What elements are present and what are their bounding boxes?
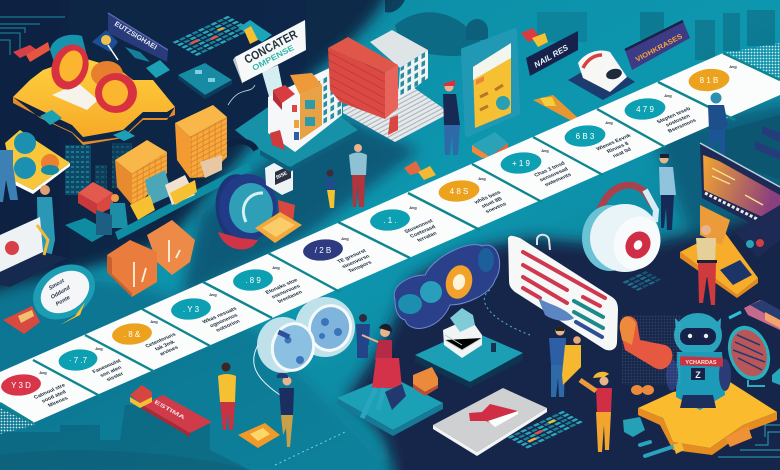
teal road band to buildings bbox=[65, 163, 252, 242]
step 2: Avg bbox=[95, 346, 103, 351]
step 9 bbox=[500, 148, 575, 189]
speech bubble with text bbox=[23, 253, 105, 331]
red building and grey base bbox=[328, 30, 450, 142]
twin discs bbox=[254, 297, 357, 395]
teal platform with paper stack bbox=[415, 308, 523, 388]
orange buildings bbox=[115, 105, 227, 220]
person: navy figure behind centre bbox=[356, 314, 370, 358]
phone with yellow screen bbox=[463, 30, 518, 135]
step 10: neat 0d bbox=[612, 147, 633, 159]
step 3: . 8 & bbox=[124, 330, 141, 339]
teal platform below white building bbox=[228, 85, 358, 172]
oval data badge bbox=[721, 320, 777, 386]
step 5 bbox=[232, 265, 308, 306]
dotted path bbox=[484, 290, 530, 335]
small person and box near red block bbox=[96, 194, 128, 235]
person: red shirt pointing bbox=[580, 372, 612, 452]
icon: red yellow cubes bbox=[521, 28, 548, 47]
lock shackle bbox=[537, 235, 550, 250]
icon: orange block bbox=[413, 367, 438, 396]
step 6: sinenvorsn bbox=[341, 254, 371, 270]
sheet on platform bbox=[52, 83, 98, 110]
step 1 bbox=[0, 370, 75, 411]
step 12: 8 1 B bbox=[700, 76, 718, 85]
person: man in blue shirt bbox=[349, 144, 367, 207]
step 1: Mirenes bbox=[47, 396, 70, 409]
small person at banner bbox=[92, 30, 118, 60]
icon: red tray bbox=[3, 306, 40, 334]
monitor bbox=[700, 143, 780, 238]
QR box bbox=[265, 158, 293, 195]
colourful blocks bbox=[145, 170, 172, 205]
step 3: tak 3mk bbox=[154, 340, 176, 352]
icon: small orange shapes bbox=[631, 385, 654, 395]
step 9: Chas 3 tmsd bbox=[533, 161, 566, 178]
step 7: Avg bbox=[409, 205, 417, 210]
orange cylinder bbox=[91, 61, 123, 87]
step 12 bbox=[687, 64, 737, 93]
step 2: · 7 .7 bbox=[69, 356, 88, 365]
speech bubble with text: Smost bbox=[48, 278, 67, 292]
person: tall teal figure bbox=[37, 185, 55, 262]
step 3: Cetentoruns bbox=[144, 332, 177, 349]
step 7: Coeterasd bbox=[409, 224, 437, 239]
person: red cap bbox=[443, 80, 460, 155]
person: woman in red skirt bbox=[362, 324, 406, 418]
robot bbox=[666, 313, 731, 410]
step 10: 6 B 3 bbox=[576, 132, 595, 141]
step 10: Wlenes Eevnk bbox=[595, 133, 632, 152]
person: yellow jumper bbox=[218, 362, 236, 430]
step 9: sensoresad bbox=[538, 167, 570, 183]
step 2: son aten bbox=[99, 365, 123, 379]
step 6 bbox=[302, 236, 376, 275]
person: dark blue with yellow trousers bbox=[277, 373, 294, 447]
teal blob behind ring bbox=[50, 35, 88, 65]
small matrix upper bbox=[622, 271, 661, 291]
sign: NAIL RES: NAIL RES bbox=[532, 43, 570, 70]
step 8: Avg bbox=[478, 176, 486, 181]
colored data matrix top bbox=[172, 15, 254, 57]
lock with red core bbox=[582, 185, 668, 276]
step 5: . 8 9 bbox=[245, 276, 261, 285]
person: woman red trousers bbox=[696, 225, 717, 305]
step 9: + 1 9 bbox=[512, 159, 531, 168]
step 4: ogoonenos bbox=[209, 313, 239, 329]
sign post and sign: CONCATER: CONCATER bbox=[242, 27, 300, 67]
step 8 bbox=[438, 176, 511, 216]
card with red and green lines bbox=[508, 235, 618, 350]
step 7: Stuvennost bbox=[404, 218, 434, 235]
step 11: Avg bbox=[664, 93, 672, 98]
robot: YCHARDAS bbox=[685, 360, 717, 366]
ring: right bbox=[95, 73, 137, 113]
icon: small blocks bbox=[404, 161, 436, 180]
city silhouette: bottom left bbox=[0, 405, 250, 470]
step 8: snevens bbox=[485, 202, 508, 215]
circuit lines: bottom right bbox=[718, 415, 780, 457]
step 12: Avg bbox=[729, 64, 737, 69]
road dividers bbox=[0, 53, 780, 423]
navy cloud with orange ring bbox=[394, 245, 500, 328]
colored data matrix bottom bbox=[507, 410, 585, 449]
step 7 bbox=[369, 205, 443, 245]
step 1: Y 3 D bbox=[11, 381, 31, 390]
dotted line bottom bbox=[275, 432, 345, 465]
step 9: Avg bbox=[541, 148, 549, 153]
sign: NAIL RES bbox=[526, 31, 578, 76]
blue dial with gauge bbox=[210, 170, 277, 250]
speech bubble with text: Oddund bbox=[50, 285, 72, 301]
step 4: ootsorinn bbox=[215, 319, 242, 333]
icon: teal right piece bbox=[772, 368, 780, 385]
tile: red banner bbox=[142, 395, 212, 437]
step 8: whils bass bbox=[473, 190, 502, 206]
step 11 bbox=[624, 93, 701, 136]
step 2 bbox=[58, 346, 131, 385]
sign post and sign: CONCATER bbox=[228, 20, 306, 105]
step 7: . 1 . bbox=[383, 216, 397, 225]
device with keypad bbox=[729, 300, 780, 330]
tablet with people left bbox=[0, 130, 70, 202]
sign: VIOHKRASES: VIOHKRASES bbox=[635, 33, 684, 64]
red stacked block bbox=[78, 182, 113, 215]
step 2: sisster bbox=[105, 371, 125, 383]
white building bbox=[268, 63, 342, 152]
laptop bottom left bbox=[0, 217, 68, 287]
step 10: Avg bbox=[605, 120, 613, 125]
step 5: ssenorvues bbox=[270, 284, 302, 300]
step 3 bbox=[111, 319, 186, 360]
icon: red yellow block bbox=[130, 385, 152, 408]
person: left blue bbox=[0, 150, 18, 202]
step 5: Etonaks stoe bbox=[265, 278, 299, 296]
icon: teal capsules bbox=[640, 442, 672, 456]
speech bubble with text: Ponte bbox=[55, 295, 71, 308]
tile: red banner: ESTIMA bbox=[153, 400, 186, 421]
step 8: 4 8 S bbox=[450, 187, 468, 196]
step 5: Avg bbox=[272, 265, 280, 270]
orange cloud blobs with dotted field bbox=[620, 315, 682, 385]
icon: teal box bbox=[623, 417, 645, 437]
person: man blue with yellow folder bbox=[549, 326, 581, 397]
yellow hexagonal platform with rings bbox=[13, 35, 175, 145]
step 6: Avg bbox=[341, 236, 349, 241]
step 7: terratan bbox=[416, 231, 438, 243]
step 8: stuet 8B bbox=[480, 196, 504, 209]
step 3: arvines bbox=[159, 345, 180, 357]
step 11: 4 7 9 bbox=[636, 105, 654, 114]
step 4 bbox=[170, 292, 247, 336]
yellow robot platform bbox=[638, 382, 777, 455]
step 5: brentasen bbox=[277, 290, 304, 305]
person: blue figure on road bbox=[707, 92, 728, 155]
step 1: sood ated bbox=[41, 390, 68, 404]
yellow desk with keyboard bbox=[680, 205, 780, 298]
teal centre platform bbox=[337, 376, 443, 436]
step 11: sostosten bbox=[665, 113, 692, 128]
city map silhouette: top right towers bbox=[385, 0, 775, 60]
robot: Z bbox=[695, 370, 701, 380]
ring: left bbox=[45, 39, 95, 95]
tile: orange grid with bricks bbox=[255, 200, 302, 243]
icon: small teal blocks bbox=[40, 47, 170, 141]
person: blue shirt near lock bbox=[659, 154, 676, 230]
step 1: Avg bbox=[39, 370, 47, 375]
grey phone with red arrow bbox=[433, 388, 547, 456]
white machine with red stripe bbox=[568, 50, 635, 100]
circuit lines: top left bbox=[0, 17, 65, 58]
step 4: Avg bbox=[209, 292, 217, 297]
person: yellow trousers bbox=[322, 170, 335, 208]
icon: orange box with line bbox=[673, 426, 752, 454]
icon: yellow chip bbox=[533, 95, 578, 120]
icon: red blocks top left bbox=[13, 42, 50, 62]
sign: purple banner: EUTZSIGHAEI bbox=[113, 21, 158, 51]
step 6: TE gresurst bbox=[336, 248, 368, 265]
sign: purple banner bbox=[108, 13, 168, 62]
step 4: Wkas nesuats bbox=[201, 306, 238, 325]
dark panel stack behind monitor bbox=[725, 115, 780, 180]
step 11: Stepten teseb bbox=[656, 106, 693, 125]
icon: teal orange box bbox=[472, 132, 508, 160]
step 10 bbox=[564, 120, 641, 163]
icon: teal book bbox=[178, 63, 232, 99]
QR box: BISE bbox=[275, 170, 289, 181]
step 3: Avg bbox=[150, 319, 158, 324]
step 2: Fanewoulst bbox=[91, 358, 123, 375]
step 10: Rinnes 8 bbox=[606, 141, 630, 155]
dark towers left bbox=[65, 143, 132, 195]
step 11: Bsersmons bbox=[667, 118, 698, 134]
step 4: . Y 3 bbox=[183, 305, 200, 314]
step 1: Catmoul stre bbox=[33, 383, 67, 401]
step 6: / 2 B bbox=[315, 246, 331, 255]
orange heart blocks bbox=[107, 220, 195, 297]
tile: orange grid bbox=[238, 423, 280, 448]
yellow folder with figure bbox=[562, 345, 581, 385]
step 9: swtements bbox=[544, 172, 573, 188]
sign: VIOHKRASES bbox=[625, 21, 690, 70]
step 6: Tenopors bbox=[347, 260, 373, 274]
sign post and sign: CONCATER: OMPENSE bbox=[251, 43, 296, 73]
